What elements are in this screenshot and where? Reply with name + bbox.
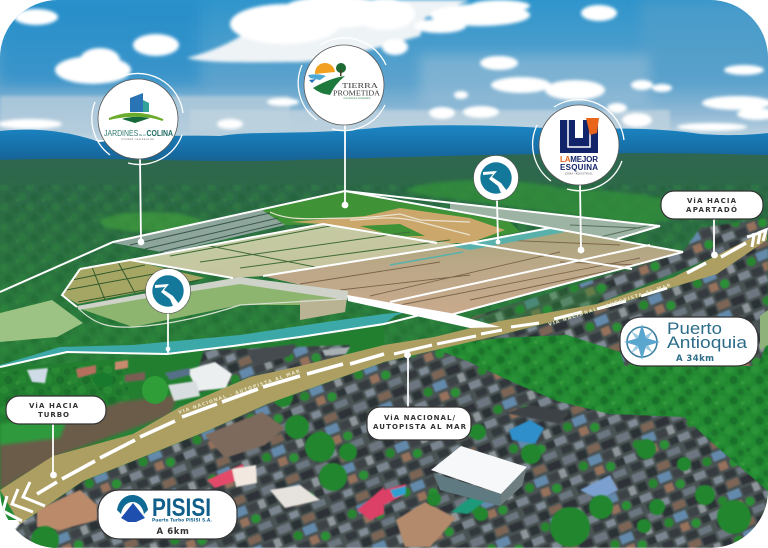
ground west of the road	[0, 325, 384, 490]
land plots	[0, 191, 683, 342]
logo badge: La Mejor Esquina: ZONA INDUSTRIAL	[565, 172, 593, 176]
callout: Vía hacia Turbo	[6, 396, 106, 478]
plot: pale green grid	[130, 224, 463, 278]
logo badge: Tierra Prometida: TIERRA	[342, 81, 379, 90]
callout: Vía Nacional / Autopista al Mar	[367, 352, 471, 440]
plot outlines	[0, 191, 683, 315]
pin: Tierra Prometida	[298, 38, 386, 208]
callout: Vía hacia Apartadó	[661, 191, 763, 258]
logo badge: Tierra Prometida	[298, 38, 386, 131]
white wedge path	[347, 295, 500, 328]
callout: Vía hacia Apartadó: APARTADÓ	[686, 205, 737, 214]
pin: river icon south	[146, 268, 190, 353]
trees in town	[31, 387, 751, 548]
callout: Vía hacia Turbo: ViA HACIA	[29, 402, 79, 410]
road: Vía Nacional / Autopista al Mar	[0, 230, 767, 524]
logo badge: La Mejor Esquina: ESQUINA	[560, 163, 598, 172]
road label: VIA NACIONAL - AUTOPISTA AL MAR	[178, 368, 301, 416]
logo badge: Tierra Prometida: PROMETIDA	[333, 88, 381, 98]
white warehouse	[431, 446, 527, 506]
icon: Pisisi logo	[117, 495, 148, 522]
town base	[0, 218, 768, 548]
callout: Puerto Antioquia, a 34km: A 34km	[676, 354, 714, 364]
plot: west small grid	[62, 260, 205, 304]
road: Vía Nacional / Autopista al Mar: VIA NACIONAL - AUTOPISTA AL MAR	[548, 283, 672, 328]
plot: tan lots	[263, 228, 683, 315]
icon: compass rose	[624, 324, 660, 360]
plot: top-left grid	[113, 210, 285, 253]
logo badge: La Mejor Esquina	[533, 100, 624, 191]
forest east	[430, 310, 768, 491]
logo badge: Tierra Prometida: Condominio Campestre	[344, 97, 371, 100]
callout: Pisisi, a 6km: Puerto Turbo PISISI S.A.	[152, 518, 212, 522]
logo badge: Jardines de la Colina: Unidad residencial	[122, 137, 154, 141]
callout: Pisisi, a 6km: PISISI	[152, 494, 211, 522]
callout: Puerto Antioquia, a 34km: Antioquia	[667, 334, 748, 352]
plot: teal lagoon strip	[450, 228, 565, 250]
clouds	[0, 0, 768, 131]
mountains	[0, 125, 768, 162]
logo badge: Jardines de la Colina	[92, 73, 183, 164]
callout: Vía Nacional / Autopista al Mar: AUTOPISTA AL MAR	[373, 423, 467, 431]
callout: Vía hacia Turbo: TURBO	[38, 411, 69, 419]
callout: Vía Nacional / Autopista al Mar: ViA NACIONAL/	[384, 414, 455, 422]
pin: Jardines de la Colina	[92, 73, 183, 245]
forest	[0, 153, 768, 520]
callout: Puerto Antioquia, a 34km: Puerto	[667, 320, 722, 338]
callout: Pisisi, a 6km	[98, 490, 237, 539]
callout: Puerto Antioquia, a 34km	[620, 317, 758, 366]
plot: lower pale field	[82, 284, 336, 326]
callout: Vía hacia Apartadó: ViA HACIA	[687, 197, 737, 205]
icon: river	[474, 156, 518, 200]
pin: river icon north	[474, 156, 518, 244]
sky	[0, 0, 768, 140]
callout: Pisisi, a 6km: A 6km	[157, 527, 189, 537]
plot: north-east lots	[450, 203, 660, 239]
plot: hill with earthworks	[262, 192, 520, 245]
icon: river	[146, 268, 190, 314]
logo badge: La Mejor Esquina: LAMEJOR	[560, 155, 598, 164]
river	[0, 312, 420, 367]
buildings	[27, 344, 618, 547]
pin: La Mejor Esquina	[533, 100, 624, 253]
logo badge: Jardines de la Colina: JARDINES DE LA COLINA	[104, 128, 173, 138]
plot: west pale patch	[0, 300, 83, 342]
road direction chevrons	[3, 230, 766, 521]
